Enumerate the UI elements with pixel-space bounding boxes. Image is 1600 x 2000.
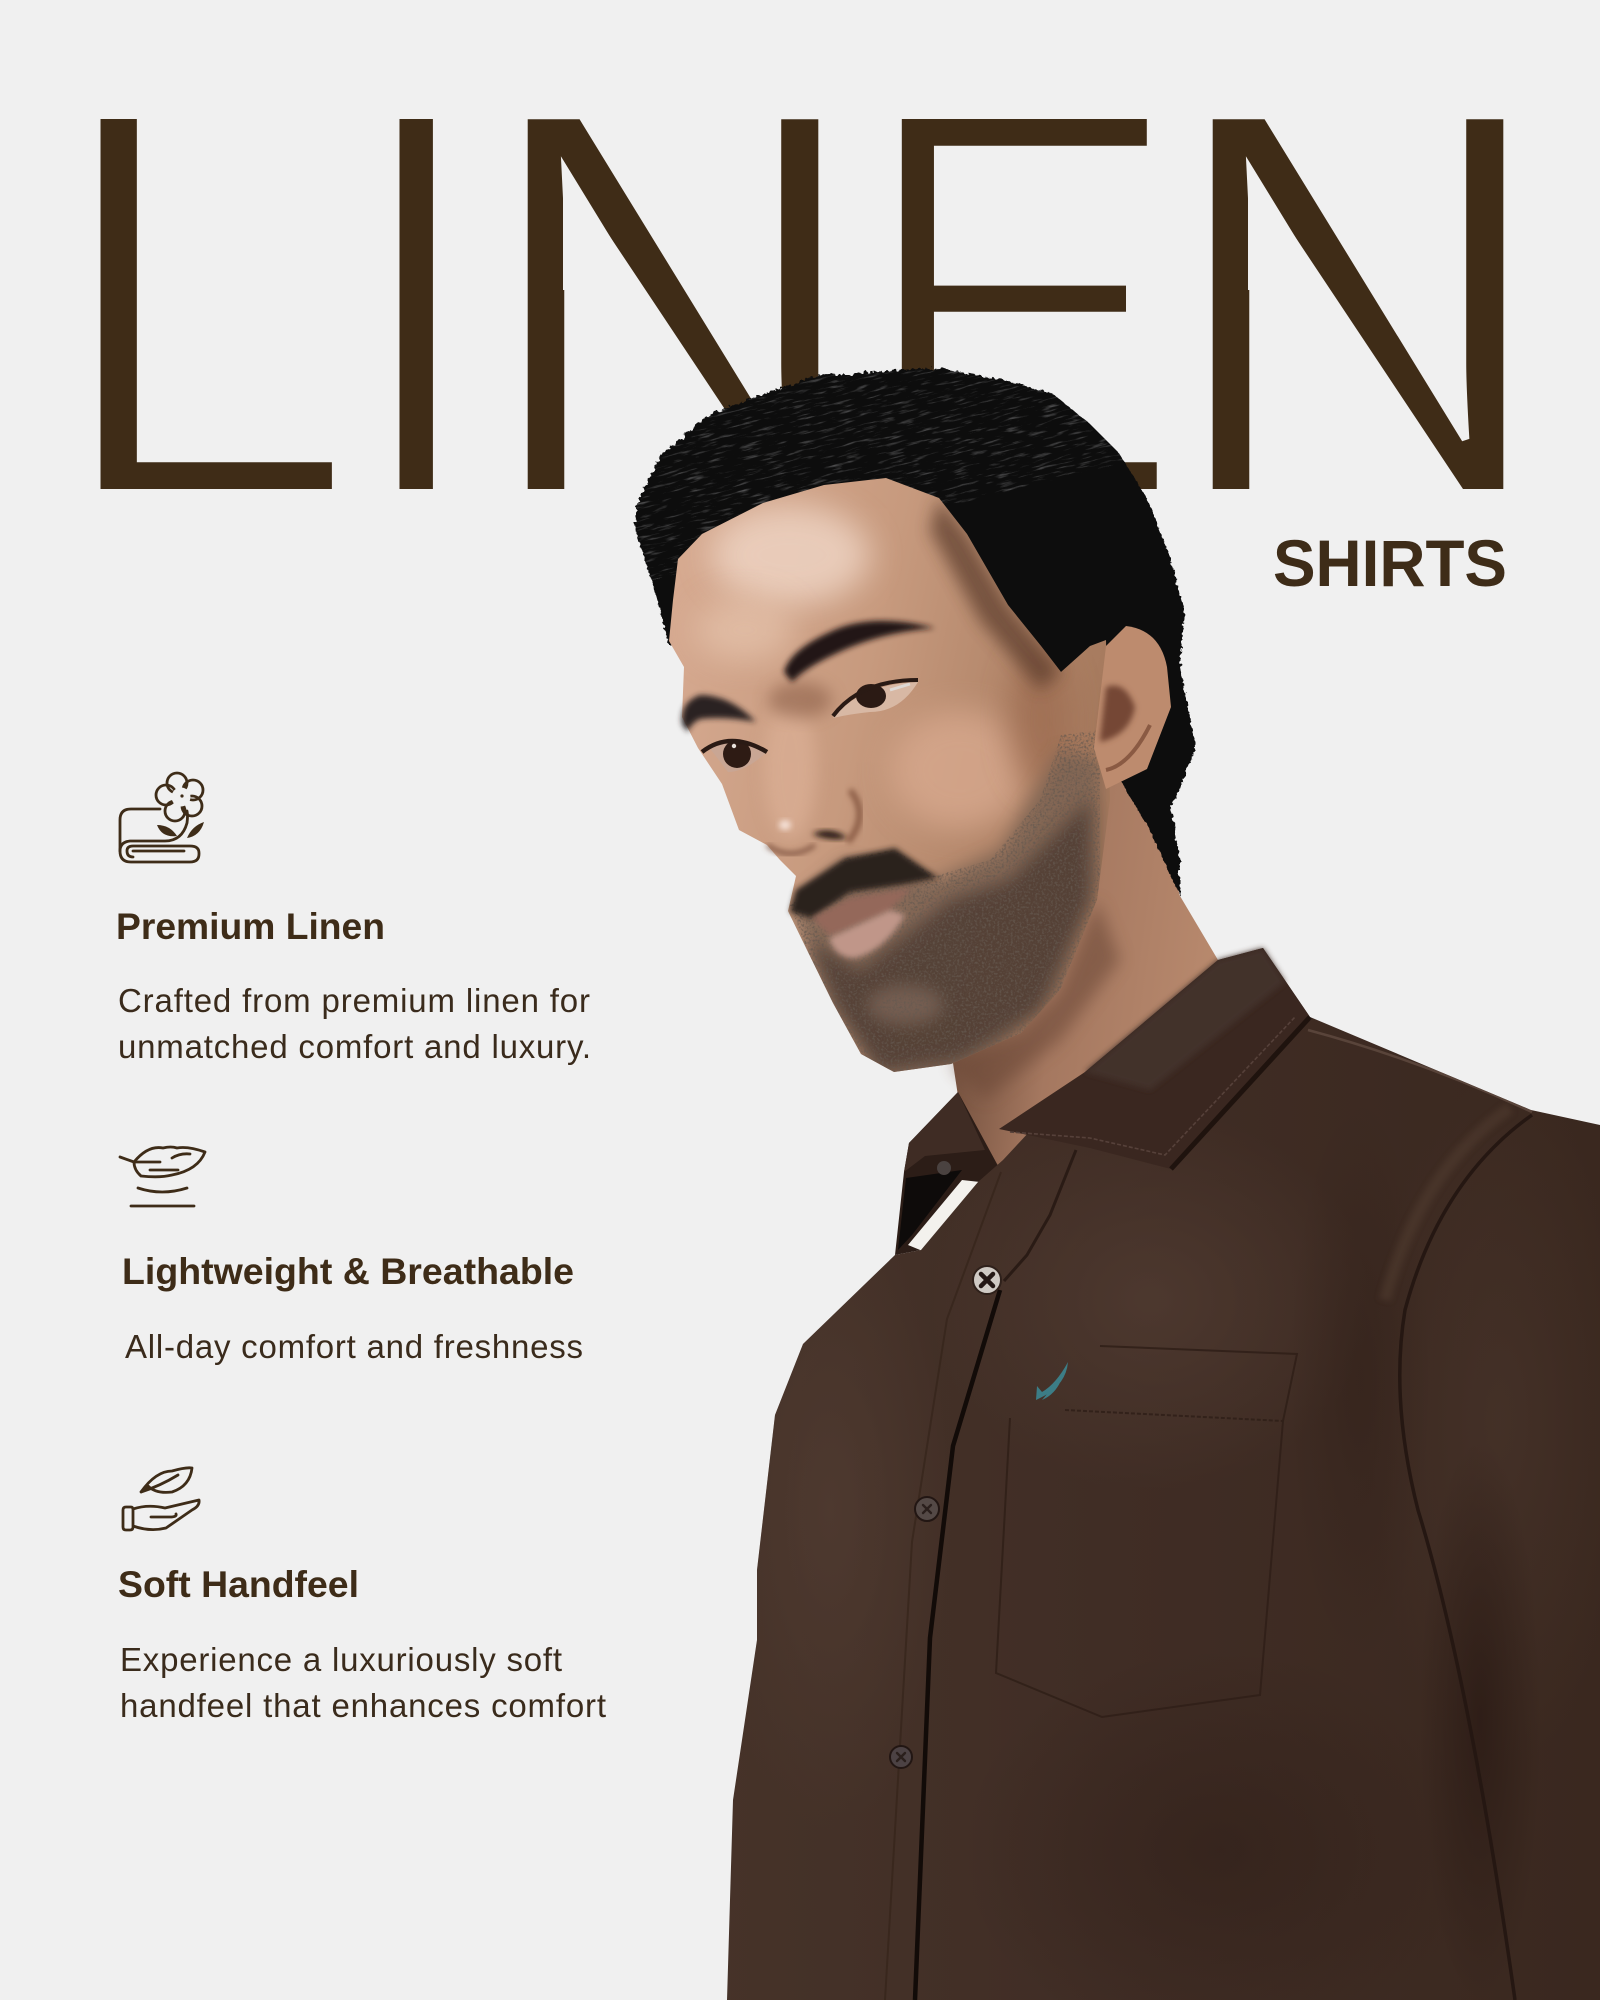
subtitle: SHIRTS: SHIRTS [1273,526,1507,600]
description: unmatched comfort and luxury. [118,1028,591,1065]
placket button: white [973,1266,1001,1294]
heading: Lightweight & Breathable [122,1251,574,1292]
title: LINEN: L [46,0,359,616]
brow: left [682,695,756,732]
title: LINEN [46,0,1551,617]
icon: feather [120,1147,205,1206]
hair [634,366,1196,896]
pocket [996,1346,1297,1717]
icon: hand with leaf [123,1468,199,1530]
left collar inside [895,1092,1003,1255]
icon: folded linen with flower [120,773,204,862]
description [118,982,591,1065]
placket button: middle [915,1497,939,1521]
lips [812,888,912,958]
feature: Lightweight & Breathable [120,1147,583,1365]
face [669,478,1171,1080]
feature: Premium Linen [116,773,591,1065]
title: LINEN: N [480,0,866,610]
eye: left [702,740,767,772]
description: handfeel that enhances comfort [120,1687,606,1724]
shirt body [700,940,1600,2000]
description: Experience a luxuriously soft [120,1641,562,1678]
brow: right [784,621,935,682]
description: Crafted from premium linen for [118,982,590,1019]
title: LINEN: I [344,0,488,617]
title: LINEN: E [854,0,1185,617]
nose [767,790,860,854]
title: LINEN: N [1165,0,1551,610]
placket button: lower [890,1746,912,1768]
sleeve seam [1400,1115,1532,2000]
heading: Premium Linen [116,906,385,947]
logo: teal bird [1036,1362,1068,1400]
placket edge [885,1150,1076,2000]
beard shadow [790,750,1100,1080]
description: All-day comfort and freshness [125,1328,583,1365]
heading: Soft Handfeel [118,1564,359,1605]
photo: man in brown linen shirt [634,366,1600,2000]
collar right [999,948,1310,1169]
eye: right [833,680,918,718]
ear [1094,626,1171,789]
shoulder yoke seam [1308,1030,1532,1112]
neck [951,780,1240,1190]
feature: Soft Handfeel [118,1468,606,1724]
shoulder band [1385,1108,1510,1300]
description [120,1641,606,1724]
moustache [790,848,938,918]
